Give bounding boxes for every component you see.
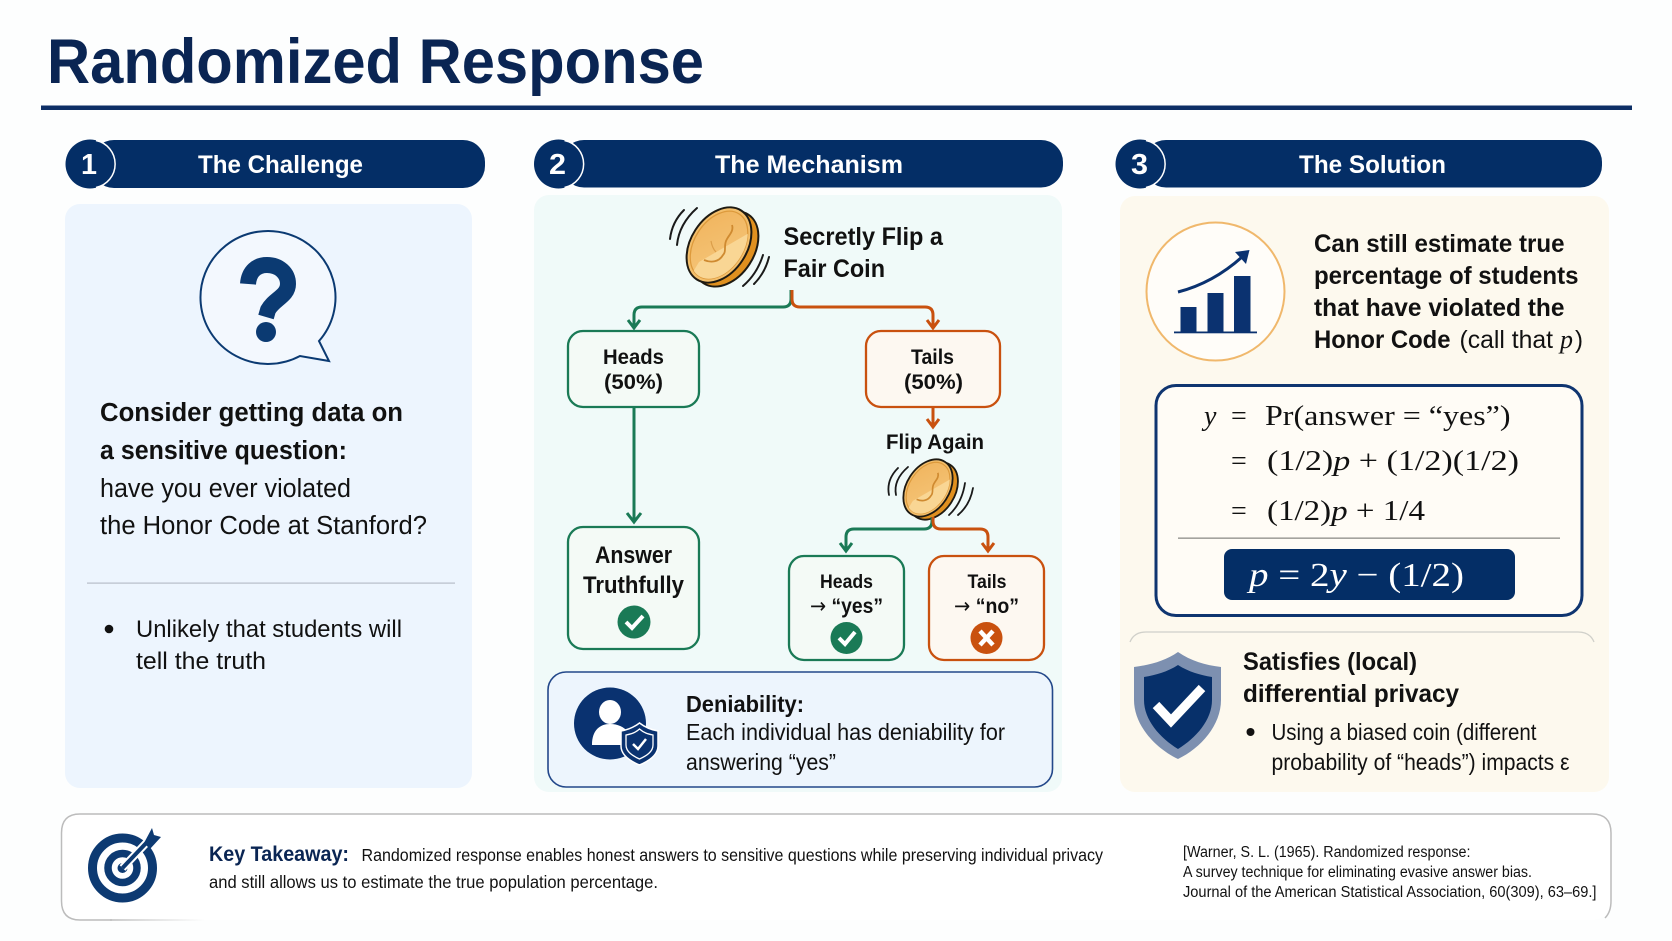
section 2 header: The Mechanism: [534, 140, 1063, 188]
box: tails 50%: [866, 331, 1000, 407]
icon: question speech bubble: [200, 231, 335, 364]
equation line 1: Pr(answer = “yes”): [1265, 401, 1510, 432]
result: p formula: [1224, 549, 1515, 600]
section 1 header: The Challenge: 1: [81, 149, 97, 181]
arrow: to heads: [628, 290, 791, 328]
box: heads 50%: (50%): [604, 370, 663, 394]
box: heads yes: [789, 556, 904, 660]
text: differential privacy: [1243, 648, 1459, 708]
heading: secretly flip: [784, 223, 944, 283]
panel: key takeaway: [62, 814, 1611, 921]
box: heads 50%: [568, 331, 699, 407]
callout: deniability: [548, 672, 1052, 787]
section 1 header: The Challenge: The Challenge: [198, 151, 363, 179]
box: answer truthfully: Truthfully: [583, 572, 685, 599]
bullet: unlikely truth: Unlikely that students will: [136, 616, 402, 643]
bullet: unlikely truth: tell the truth: [136, 648, 266, 675]
citation: [Warner, S. L. (1965). Randomized response:: [1183, 844, 1470, 861]
box: answer truthfully: Answer: [595, 542, 672, 569]
heading: secretly flip: Secretly Flip a: [784, 223, 944, 251]
equation line 1: y: [1201, 401, 1217, 432]
text: sensitive question: a sensitive question:: [100, 437, 347, 465]
equation line 2: (1/2) p + (1/2)(1/2): [1267, 446, 1519, 477]
bullet: unlikely truth: [105, 616, 402, 675]
panel: the mechanism: [534, 195, 1062, 792]
icon: person with shield: [574, 688, 658, 765]
section 3 header: The Solution: The Solution: [1299, 151, 1446, 179]
text: sensitive question: Consider getting data on: [100, 399, 403, 427]
text: estimate p: p: [1558, 325, 1573, 354]
text: sensitive question: have you ever violated: [100, 475, 351, 503]
bullet: biased coin: [1246, 719, 1570, 775]
box: heads yes: → “yes”: [810, 594, 883, 618]
icon: rising bar chart: [1146, 222, 1284, 360]
icon: flipping coin: [669, 206, 770, 288]
text: estimate p: Can still estimate true: [1314, 230, 1565, 258]
box: heads 50%: Heads: [603, 345, 664, 369]
text: differential privacy: differential privacy: [1243, 680, 1459, 708]
citation: A survey technique for eliminating evasive answer bias.: [1183, 864, 1532, 881]
text: deniability: [686, 691, 1005, 775]
box: tails 50%: (50%): [904, 370, 963, 394]
text: key takeaway: Randomized response enables honest answers to sensitive questions while preserving individual privacy: [362, 845, 1103, 865]
equation line 3: (1/2) p + 1/4: [1267, 496, 1425, 527]
text: estimate p: (call that: [1460, 326, 1553, 354]
panel: the solution: [1120, 196, 1609, 792]
text: deniability: Each individual has deniability for: [686, 719, 1005, 745]
box: tails no: Tails: [968, 572, 1006, 593]
arrow: tails to flip again: [927, 407, 939, 427]
icon: orange cross: [970, 622, 1002, 654]
box: tails no: → “no”: [954, 594, 1019, 618]
arrow: second flip to tails: [933, 517, 994, 551]
section 3 header: The Solution: [1116, 140, 1602, 188]
section 3 header: The Solution: 3: [1131, 149, 1148, 181]
text: sensitive question: the Honor Code at Stanford?: [100, 512, 427, 540]
icon: target with arrow: [92, 828, 161, 898]
text: sensitive question: [100, 399, 427, 540]
text: estimate p: that have violated the: [1314, 294, 1565, 322]
arrow: to tails: [792, 290, 939, 328]
box: tails 50%: Tails: [911, 345, 954, 369]
arrow: heads to answer truthfully: [627, 407, 641, 522]
label: flip again: Flip Again: [886, 431, 984, 454]
formula box: [1156, 386, 1582, 616]
text: differential privacy: Satisfies (local): [1243, 648, 1417, 676]
bullet: biased coin: probability of “heads”) impacts ε: [1272, 749, 1570, 775]
text: estimate p: percentage of students: [1314, 262, 1578, 290]
arrow: second flip to heads: [840, 517, 932, 551]
section 1 header: The Challenge: [66, 140, 485, 188]
box: answer truthfully: [568, 527, 699, 649]
text: estimate p: ): [1575, 326, 1583, 354]
title: Randomized Response: [47, 27, 704, 97]
text: deniability: answering “yes”: [686, 749, 836, 775]
text: key takeaway: Key Takeaway:: [209, 843, 349, 866]
bullet: biased coin: Using a biased coin (different: [1272, 719, 1537, 745]
citation: Journal of the American Statistical Association, 60(309), 63–69.]: [1183, 884, 1596, 901]
icon: green check: [618, 606, 650, 638]
citation: [1183, 844, 1596, 901]
section 2 header: The Mechanism: 2: [549, 149, 566, 181]
text: deniability: Deniability:: [686, 691, 804, 717]
icon: green check: [830, 622, 862, 654]
heading: secretly flip: Fair Coin: [784, 255, 885, 283]
box: tails no: [929, 556, 1044, 660]
section 2 header: The Mechanism: The Mechanism: [715, 151, 903, 179]
panel: the challenge: [65, 204, 472, 788]
equation line 1: =: [1231, 401, 1247, 432]
box: heads yes: Heads: [820, 572, 873, 593]
text: estimate p: [1314, 230, 1583, 354]
text: key takeaway: and still allows us to estimate the true population percentage.: [209, 872, 658, 892]
text: estimate p: Honor Code: [1314, 326, 1451, 354]
equation line 1: [1201, 401, 1510, 432]
result: p formula: p = 2y − (1/2): [1247, 557, 1464, 594]
icon: second flipping coin: [888, 458, 974, 521]
icon: privacy shield: [1134, 652, 1221, 759]
text: key takeaway: [209, 843, 1103, 892]
equation line 2: =: [1231, 446, 1247, 477]
equation line 3: =: [1231, 496, 1247, 527]
